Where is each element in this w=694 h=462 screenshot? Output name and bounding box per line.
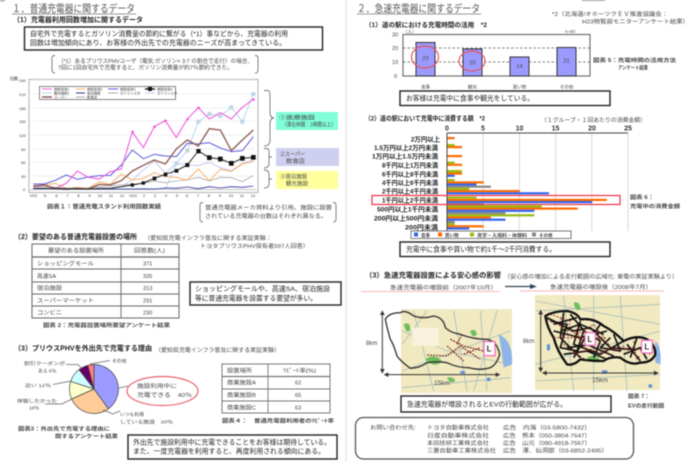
caption: figure 3: 関するアンケート結果 [55,432,119,440]
bar chart: use of charging time: 買い物 [513,84,527,90]
chart legend [40,86,177,100]
left section: normal chargers [10,2,341,459]
source note: Hokkaido survey: *2（北海道/オホーツクＥＶ推進協議会： [552,10,668,18]
chart legend: ガソリンスタ [120,90,140,96]
line chart: charging stand usage [10,75,258,198]
pie labels and leader lines: している施設 20％ [120,418,173,426]
category box: lodging: 観光施設 [286,180,308,188]
horizontal bar chart: spend amounts: 20 [588,126,596,132]
horizontal bar chart: spend amounts: 5 [481,126,485,132]
highlight rectangle: 1-2 thousand yen [372,196,620,204]
source note: spend per group: （１グループ・１回あたりの消費金額） [541,116,646,124]
caption: figure 4: 図表４： 普通充電器利用者のﾘﾋﾟｰﾄ率 [222,416,334,424]
x axis labels: 9 [219,193,222,198]
table: desired locations [32,244,179,318]
bar chart: use of charging time: 0 [394,74,397,80]
horizontal bar chart: spend amounts: 10 [516,126,523,132]
x axis labels [30,193,256,198]
callout: range expands [401,396,611,412]
data lines [33,92,256,189]
x axis labels: 6 [55,193,58,198]
y axis labels: 0 [23,187,26,192]
chart legend: 病院全体3 [120,86,136,92]
table: repeat rate: 63 [295,406,301,412]
pie labels and leader lines: その他 [112,358,127,364]
category box: medical facilities: （滞在時間：1時間以上） [282,120,336,128]
callout ellipse: 40 percent: 充電できる 40％ [137,391,192,399]
sub-heading: before installation [361,284,500,292]
map: before: 8km [366,341,377,347]
chart legend: ガソリンスタ [157,90,177,96]
table: desired locations: 回答数(人) [134,246,165,254]
caption: figure 2: 図表 2：充電器設置場所要望アンケート結果 [43,321,171,329]
bar chart: use of charging time: 30 [392,32,398,38]
title: quick charger data: ２．急速充電器に関するデータ [357,2,480,15]
x axis labels: 11 [240,193,245,198]
contact panel: 三菱自動車工業株式会社 [427,446,496,454]
table: desired locations: 291 [143,298,152,304]
y axis labels: 180 [19,106,26,111]
legend: spend categories: その他 [539,232,553,239]
row labels: 200円未満 [405,222,439,232]
source note: survey: トヨタプリウスPHV保有者597人回答） [200,242,309,250]
caption: figure 7 [628,392,664,410]
y axis labels: 回数 [10,75,18,81]
bar chart: use of charging time: その他 [560,84,574,90]
horizontal bar chart: spend amounts: 25 [624,126,632,132]
row labels: 2万円以上 [411,134,441,144]
bracket: group one [264,90,274,146]
heading: section 3: （3）プリウスPHVを外出先で充電する理由 [14,344,152,352]
bracket: group two [264,148,272,168]
x axis labels: 10 [229,193,234,198]
map: after: 8km [523,339,534,345]
x axis labels: 4 [165,193,168,198]
chart legend: 観光施設1 [54,90,70,96]
bracket: group three [264,170,272,188]
caption: figure 3: 図表3：外出先で充電する理由に [18,424,110,432]
legend: spend categories: 食事 [421,232,430,239]
y axis labels: 30 [21,174,26,179]
pie chart: reasons for charging [69,364,118,414]
category box: supermarkets: 飲食店 [286,157,305,165]
contact panel: 日産自動車株式会社 [427,432,489,440]
row labels: 500円以上1千円未満 [377,204,439,214]
caption: figure 7: 図表 7： [628,392,650,400]
row labels: 1.5万円以上2万円未満 [374,143,439,152]
bar chart: use of charging time: n=60 [565,29,576,34]
map: after: L [644,343,649,352]
legend: spend categories: 見学・入場料・体験料 [477,232,528,239]
category box: lodging [276,171,338,189]
x axis labels: 7 [66,193,69,198]
map: before: 15km [434,380,450,387]
table: desired locations: コンビニ [37,308,62,316]
table: repeat rate: 65 [295,393,301,399]
contact panel: 広告 山元（080-4918-7567） [503,439,591,447]
heading: section 1: （1）充電器利用回数増加に関するデータ [13,15,143,24]
row labels: 200円以上500円未満 [374,214,439,222]
table: desired locations: 335 [143,274,152,280]
x axis labels: 2 [143,193,146,198]
note bracket: maker data [200,202,336,222]
heading: quick section 1: （1）道の駅における充電時間の活用 *2 [365,20,487,29]
bar chart: use of charging time: 観光 [468,84,477,90]
sub-heading: after installation: 急速充電器の増設後（2008年7月） [550,283,652,291]
title: normal charger data: １．普通充電器に関するデータ [12,2,135,15]
note bracket: Prius PHV saving: 7回に1回自宅外で充電すると、ガソリン消費量が約7％節約できた。 [58,64,233,72]
source note: survey [144,234,309,250]
table: desired locations: 313 [143,286,152,292]
caption: figure 6: 充電中の消費金額 [630,202,681,210]
x axis labels: 8 [208,193,211,198]
row labels: 1万円以上1.5万円未満 [372,152,439,160]
contact panel: 広告 澤、仙洞郎（03-6852-2495） [503,446,608,454]
category box: lodging: ③宿泊施設 [280,172,307,180]
map: after: L [587,335,592,344]
contact panel [356,418,634,459]
source note: range experiment: （安心感の増加による走行範囲の広域化: 東電の実証実験より） [504,272,678,280]
contact panel: トヨタ自動車株式会社 [427,424,489,432]
chart legend: 病院全体4 [157,86,173,92]
callout: location demand: 等に普通充電器を設置する要望が多い。 [195,294,317,302]
callout: repeat use: 外出先で施設利用中に充電できることをお客様は期待している。 [133,438,331,446]
table: desired locations: 230 [143,310,152,316]
table: desired locations: 宿泊施設 [37,284,62,292]
bar chart: use of charging time: 21 [563,58,570,64]
right section: quick chargers [356,2,689,459]
caption: figure 1: 図表１：普通充電スタンド利用回数実績 [47,202,161,210]
caption: figure 5: 図表 5：充電時間の活用方法 [593,56,677,64]
row labels: 8千円以上1万円未満 [382,160,439,170]
bar chart: use of charging time: 20 [392,46,398,52]
horizontal bar chart: spend amounts: 0 [445,126,449,132]
table: desired locations: 高速SA [37,272,56,280]
callout: location demand [190,282,341,305]
pie labels and leader lines: ある 6％ [38,368,57,374]
bar chart: use of charging time: 食事 [421,84,430,90]
chart legend: 宿泊施設 [87,90,101,96]
horizontal bar chart: spend amounts: 15 [552,126,559,132]
table: desired locations: スーパーマーケット [37,298,94,304]
callout ellipse: 40 percent [127,376,198,406]
table: repeat rate: 62 [295,380,301,386]
x axis labels: H23 [129,193,137,198]
caption: figure 5 [593,56,677,72]
caption: figure 5: アンケート結果 [618,64,649,72]
legend: spend categories [411,231,571,239]
row labels: 1千円以上2千円未満 [382,196,439,204]
callout: spending [400,242,610,256]
y axis labels: 60 [21,160,26,165]
x axis labels: 12 [120,193,125,198]
sub-heading: before installation: 急速充電器の増設前（2007年10月） [390,284,497,292]
contact panel: 広告 熊本（050-3804-7647） [503,432,591,440]
x axis labels: 8 [77,193,80,198]
source note: Hokkaido survey: H23物覧部モニターアンケート結果） [582,18,689,26]
callout ellipse: 40 percent: 施設利用中に [137,382,177,390]
pie labels and leader lines: いつも利用 [120,411,144,418]
category box: supermarkets [276,148,339,166]
callout: usage increase: 自宅外で充電するとガソリン消費量の節約に繋がる（*1）事などから、充電器の利用 [30,29,288,38]
callout: repeat use: また、一度充電器を利用すると、再度利用される傾向にある。 [133,446,325,456]
contact panel: 本田技研工業株式会社 [427,439,489,447]
y axis labels [10,75,26,192]
x axis labels: 10 [98,193,103,198]
callout: spending: 充電中に食事や買い物で約1千～2千円消費する。 [406,244,556,254]
table: repeat rate [222,364,330,413]
table: desired locations: 要望のある設置場所 [48,246,104,254]
bars [448,137,607,230]
map: after: 15km [592,377,608,384]
y axis labels: 90 [21,147,26,152]
callout: location demand: ショッピングモールや、高速SA、宿泊施設 [195,284,330,293]
legend: spend categories: 買い物 [445,232,459,239]
note bracket: maker data: されている充電器の台数はそれぞれ異なる。 [205,212,327,220]
caption: figure 3 [18,424,119,440]
contact panel: 広告 内海（03-5800-7432） [503,424,591,432]
callout: meals and sightseeing: お客様は充電中に食事や観光をしている。 [406,94,534,102]
x axis labels: 3 [154,193,157,198]
table: desired locations: ショッピングモール [37,260,94,268]
table: repeat rate: 商業施設A [227,378,256,386]
heading: quick section 2: （2）道の駅において充電中に消費する額 *2 [365,114,485,122]
bar chart: use of charging time: 23 [422,56,429,62]
table: desired locations: 371 [143,262,152,268]
heading: quick section 3: （3）急速充電器設置による安心感の影響 [365,270,501,280]
highlight ellipses: meal and sightseeing [412,46,485,71]
y axis labels: 240 [19,78,26,83]
chart legend: 病院全体2 [87,86,103,92]
table: repeat rate: 商業施設C [227,404,256,412]
category box: medical facilities [276,112,338,130]
row labels: 2千円以上4千円未満 [382,186,439,196]
source note: survey: （愛知県充電インフラ普及に関する実証実験： [144,234,272,242]
table: repeat rate: 商業施設B [227,391,256,399]
callout: range expands: 急速充電器が増設されるとEVの行動範囲が広がる。 [407,400,567,408]
callout: meals and sightseeing [400,91,610,106]
pie labels and leader lines: 体験したかった [17,398,57,404]
category box: medical facilities: ①医療施設 [279,114,316,122]
table: repeat rate: 設置場所 [227,366,252,374]
bar chart: use of charging time: 20 [469,60,476,66]
chart legend: 飲食店 [87,94,98,100]
x axis labels: 6 [186,193,189,198]
pie labels and leader lines: 近い 12％ [25,382,51,389]
x axis labels: 11 [109,193,114,198]
chart legend: 病院全体1 [54,86,70,92]
callout: usage increase [24,27,322,50]
note bracket: Prius PHV saving: （*1）あるプリウスPHVユーザ（電気:ガソリン= 3:7 の割合で走行）の場合、 [58,57,253,65]
x axis labels: 12 [251,193,256,198]
pie labels and leader lines: 18％ [29,406,39,412]
x axis labels: 7 [197,193,200,198]
caption: figure 6: 図表 6： [630,193,654,201]
pie labels and leader lines: 割引クーポンが [24,360,65,367]
caption: figure 7: EVの走行範囲 [628,402,664,410]
note bracket: maker data: 普通充電器メーカ資料より引用。施設に設置 [205,204,332,212]
source note: Hokkaido survey [552,10,689,26]
bar chart: use of charging time: （人） [403,29,416,34]
map: after [523,295,661,391]
heading: section 2: （2）要望のある普通充電器設置の場所 [14,232,137,241]
horizontal bar chart: spend amounts [372,126,632,232]
contact panel: お問い合わせ先: [370,424,416,432]
pie labels and leader lines [17,358,173,426]
map: before [366,309,512,393]
arrow: before to after [505,284,537,289]
table: repeat rate: ﾘﾋﾟｰﾄ率(%) [283,366,316,374]
y axis labels: 150 [19,119,26,124]
source note: experiment: （愛知県充電インフラ普及に関する実証実験） [155,346,280,354]
y axis labels: 120 [19,133,26,138]
row labels [372,134,441,232]
bar chart: use of charging time [392,29,590,90]
callout: usage increase: 回数は増加傾向にあり、お客様の外出先での充電器のニーズが高まってきている。 [30,38,286,47]
y axis labels: 210 [19,92,26,97]
bar chart: use of charging time: 14 [516,64,523,70]
row labels: 6千円以上8千円未満 [382,170,439,178]
x axis labels: H22 [30,193,38,198]
row labels: 4千円以上6千円未満 [382,178,439,187]
x axis labels: 5 [44,193,47,198]
caption: figure 6 [630,193,681,210]
callout: repeat use [128,435,337,459]
bar chart: use of charging time: 10 [392,60,398,66]
note bracket: Prius PHV saving [52,56,258,73]
map: before: L [487,345,492,354]
chart legend: スーパー [54,94,68,100]
x axis labels: 5 [176,193,179,198]
x axis labels: 9 [88,193,91,198]
category box: supermarkets: ②スーパー [280,150,305,158]
